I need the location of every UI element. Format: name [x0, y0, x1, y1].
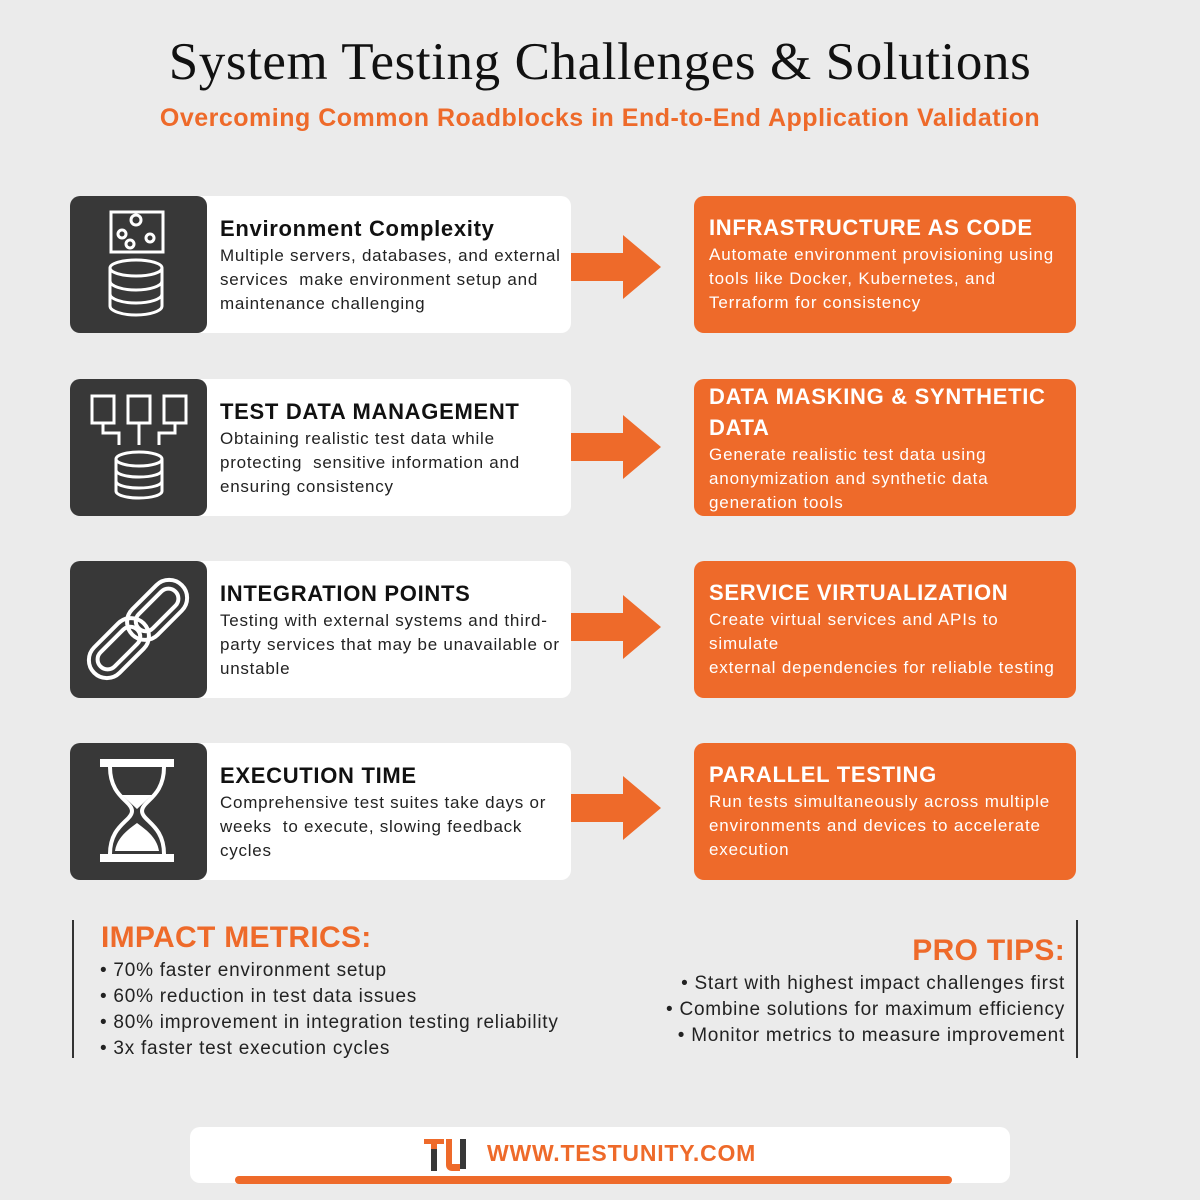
pro tips	[666, 920, 1078, 1058]
metrics list: • 70% faster environment setup	[100, 960, 387, 981]
arrow	[571, 235, 661, 299]
text	[220, 216, 561, 313]
text: Testing with external systems and third-party services that may be unavailable or unstable	[220, 611, 560, 678]
metrics list: • 3x faster test execution cycles	[100, 1038, 390, 1059]
metrics list: • 80% improvement in integration testing reliability	[100, 1012, 559, 1033]
text: TEST DATA MANAGEMENT	[220, 399, 520, 424]
subtitle: Overcoming Common Roadblocks in End-to-End Application Validation	[160, 104, 1040, 132]
solution: data masking	[694, 379, 1076, 516]
icon: data files	[70, 379, 207, 516]
solution: parallel testing	[694, 743, 1076, 880]
text: Multiple servers, databases, and external services make environment setup and maintenance challenging	[220, 246, 561, 313]
tips list: • Monitor metrics to measure improvement	[678, 1025, 1065, 1046]
solution: service virtualization: Create virtual services and APIs to simulate	[709, 610, 999, 653]
solution: infrastructure as code: Automate environment provisioning using tools like Docker, Kubernetes, and Terraform for consistency	[709, 245, 1054, 312]
arrow	[571, 415, 661, 479]
logo	[424, 1139, 466, 1171]
text: Obtaining realistic test data while protecting sensitive information and ensuring consistency	[220, 429, 520, 496]
solution: infrastructure as code	[694, 196, 1076, 333]
solution: parallel testing: Run tests simultaneously across multiple environments and devices to accelerate execution	[709, 792, 1050, 859]
tips list	[666, 973, 1065, 1046]
text	[220, 581, 560, 678]
challenge card: execution time	[70, 743, 571, 880]
tips list: • Start with highest impact challenges first	[681, 973, 1065, 994]
url: WWW.TESTUNITY.COM	[487, 1140, 756, 1166]
solution: data masking: DATA MASKING & SYNTHETIC DATA	[709, 384, 1046, 440]
challenge card: environment complexity	[70, 196, 571, 333]
text: Environment Complexity	[220, 216, 495, 241]
solution: parallel testing: PARALLEL TESTING	[709, 762, 937, 787]
impact metrics	[72, 920, 559, 1059]
text: EXECUTION TIME	[220, 763, 417, 788]
solution: service virtualization: external dependencies for reliable testing	[709, 658, 1055, 677]
text: Comprehensive test suites take days or weeks to execute, slowing feedback cycles	[220, 793, 546, 860]
solution: service virtualization: SERVICE VIRTUALIZATION	[709, 580, 1008, 605]
metrics heading: IMPACT METRICS:	[101, 921, 372, 954]
tips heading: PRO TIPS:	[912, 934, 1065, 967]
challenge card: test data management	[70, 379, 571, 516]
metrics list: • 60% reduction in test data issues	[100, 986, 417, 1007]
arrow	[571, 595, 661, 659]
footer	[190, 1127, 1010, 1183]
footer underline	[235, 1176, 952, 1184]
solution: infrastructure as code: INFRASTRUCTURE AS CODE	[709, 215, 1033, 240]
metrics list	[100, 960, 559, 1059]
title: System Testing Challenges & Solutions	[169, 33, 1031, 91]
text: INTEGRATION POINTS	[220, 581, 471, 606]
solution: data masking: Generate realistic test data using anonymization and synthetic data generation tools	[709, 445, 989, 512]
text	[220, 399, 520, 496]
icon: hourglass	[70, 743, 207, 880]
solution: service virtualization	[694, 561, 1076, 698]
tips list: • Combine solutions for maximum efficiency	[666, 999, 1065, 1020]
arrow	[571, 776, 661, 840]
text	[220, 763, 546, 860]
icon: servers	[70, 196, 207, 333]
icon: chain link	[70, 561, 207, 698]
challenge card: integration points	[70, 561, 571, 698]
